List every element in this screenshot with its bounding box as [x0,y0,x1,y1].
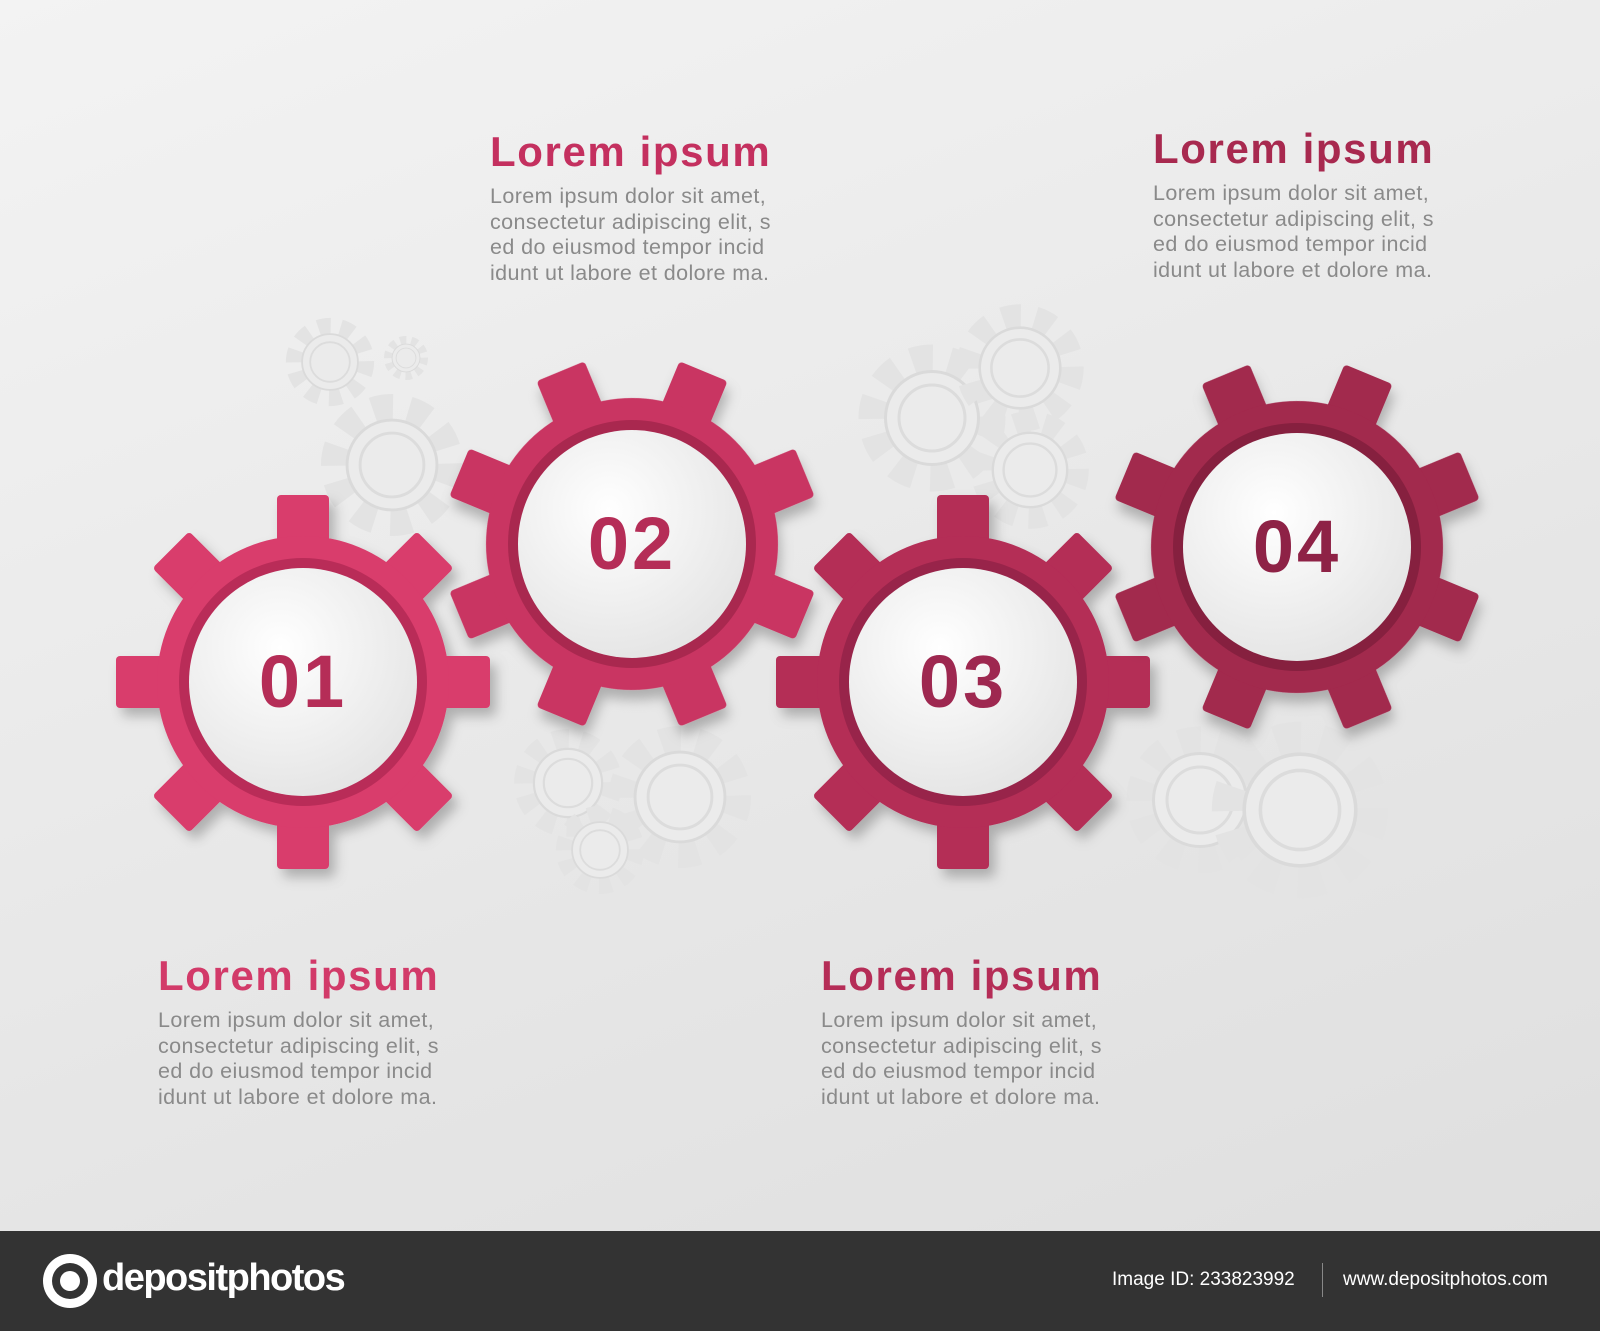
text block 01: Lorem ipsum [158,952,439,999]
text block 04: Lorem ipsum dolor sit amet, [1153,181,1429,205]
text block 04: ed do eiusmod tempor incid [1153,232,1428,256]
text block 02 [490,128,771,284]
faint background gears [294,316,1372,886]
gear 01 [116,495,490,869]
text block 01: consectetur adipiscing elit, s [158,1034,439,1058]
text block 02: consectetur adipiscing elit, s [490,210,771,234]
text block 01 [158,952,439,1108]
text block 04: idunt ut labore et dolore ma. [1153,258,1432,282]
icon: logo [43,1254,97,1308]
gear 04: 04 [1253,505,1341,588]
text block 03: idunt ut labore et dolore ma. [821,1084,1100,1108]
gear 01: 01 [259,640,347,723]
text block 02: idunt ut labore et dolore ma. [490,260,769,284]
text block 02: Lorem ipsum [490,128,771,175]
gear 04 [1053,303,1541,791]
text block 04: consectetur adipiscing elit, s [1153,206,1434,230]
text block 03 [821,952,1102,1108]
text block 03: ed do eiusmod tempor incid [821,1059,1096,1083]
text block 04 [1153,125,1434,282]
text block 04: Lorem ipsum [1153,125,1434,172]
text block 03: Lorem ipsum [821,952,1102,999]
gear 03 [776,495,1150,869]
gear 02: 02 [588,502,676,585]
gear 03: 03 [919,640,1007,723]
url: www.depositphotos.com [1343,1269,1548,1290]
text block 02: ed do eiusmod tempor incid [490,235,765,259]
footer [0,1231,1600,1331]
gear 02 [388,300,876,788]
text block 01: Lorem ipsum dolor sit amet, [158,1008,434,1032]
text block 01: idunt ut labore et dolore ma. [158,1084,437,1108]
text block 01: ed do eiusmod tempor incid [158,1059,433,1083]
text block 03: consectetur adipiscing elit, s [821,1034,1102,1058]
brand text: depositphotos [102,1257,344,1299]
text block 02: Lorem ipsum dolor sit amet, [490,184,766,208]
image id: Image ID: 233823992 [1112,1269,1295,1290]
text block 03: Lorem ipsum dolor sit amet, [821,1008,1097,1032]
